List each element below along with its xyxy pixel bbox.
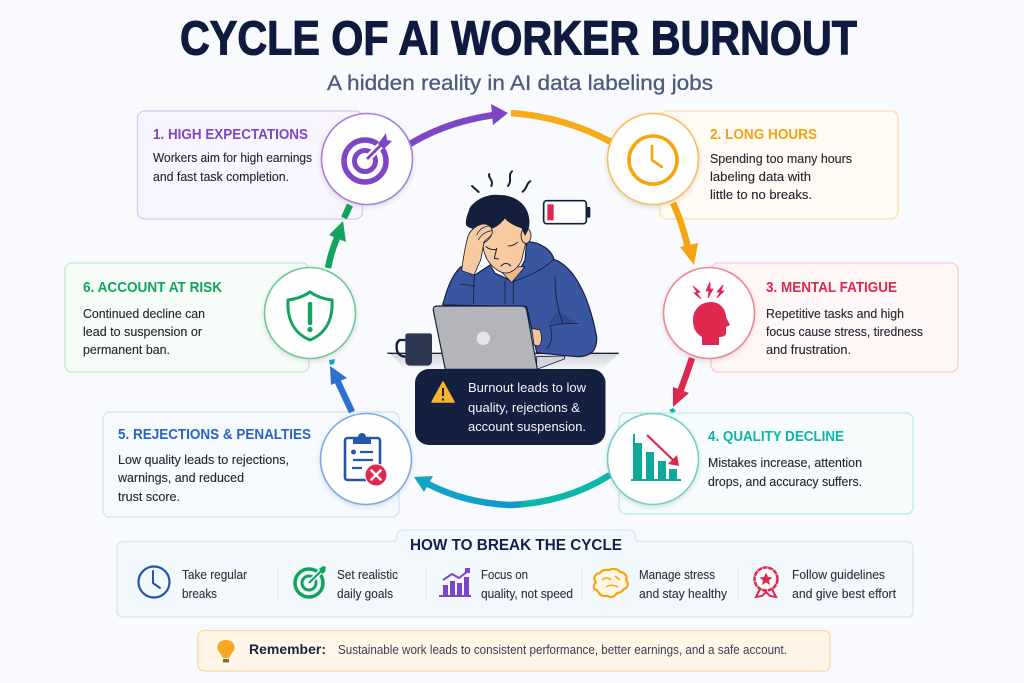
panel: 2 long hours: little to no breaks. xyxy=(710,187,812,202)
tip: manage stress: and stay healthy xyxy=(639,586,728,601)
icon: low battery xyxy=(544,201,590,224)
tip: take regular breaks: breaks xyxy=(182,586,217,601)
panel: 3 mental fatigue: Repetitive tasks and high xyxy=(766,306,904,321)
title: CYCLE OF AI WORKER BURNOUT xyxy=(180,12,857,66)
panel: 1 high expectations: Workers aim for high earnings xyxy=(153,150,312,165)
node: clock icon xyxy=(608,114,698,204)
arrow: blue xyxy=(329,359,352,412)
illustration: burned-out worker at laptop xyxy=(387,171,619,370)
node: declining chart icon xyxy=(608,414,698,504)
panel: 4 quality decline: 4. QUALITY DECLINE xyxy=(708,429,844,445)
hand on keyboard xyxy=(532,328,542,346)
arrow: orange top xyxy=(511,113,611,142)
node: head icon xyxy=(664,268,754,358)
panel: 3 mental fatigue: focus cause stress, tiredness xyxy=(766,324,923,339)
tip: set realistic daily goals xyxy=(295,566,399,601)
panel: 6 account at risk: permanent ban. xyxy=(83,342,170,357)
panel: 6 account at risk: Continued decline can xyxy=(83,306,205,321)
tip: focus on quality: quality, not speed xyxy=(481,586,573,601)
tip: follow guidelines: Follow guidelines xyxy=(792,567,885,582)
panel: remember: Remember: xyxy=(249,641,326,657)
panel: 3 mental fatigue xyxy=(711,263,958,372)
callout: burnout warning: quality, rejections & xyxy=(468,400,580,415)
panel: 5 rejections and penalties: warnings, and reduced xyxy=(117,470,244,485)
panel: 5 rejections and penalties: 5. REJECTIONS & PENALTIES xyxy=(118,427,311,443)
mug xyxy=(397,333,432,366)
laptop xyxy=(433,306,565,369)
arrow: green xyxy=(328,205,350,268)
panel: 6 account at risk: lead to suspension or xyxy=(83,324,203,339)
tip: take regular breaks xyxy=(138,566,248,601)
icon: warning triangle xyxy=(432,382,454,402)
heading: HOW TO BREAK THE CYCLE xyxy=(410,537,622,554)
panel: 4 quality decline xyxy=(619,413,913,514)
cycle arrows xyxy=(328,104,698,505)
panel: remember xyxy=(198,630,830,671)
panel: how to break the cycle xyxy=(117,530,913,617)
tip: focus on quality: Focus on xyxy=(481,567,528,582)
callout: burnout warning: account suspension. xyxy=(468,419,586,434)
panel: 3 mental fatigue: 3. MENTAL FATIGUE xyxy=(766,280,897,296)
tip: follow guidelines: and give best effort xyxy=(792,586,896,601)
panel: 6 account at risk: 6. ACCOUNT AT RISK xyxy=(83,280,222,296)
panel: 3 mental fatigue: and frustration. xyxy=(766,342,851,357)
arrow: orange down xyxy=(673,203,698,265)
panel: 4 quality decline: drops, and accuracy suffers. xyxy=(708,474,862,489)
panel: 1 high expectations: and fast task completion. xyxy=(153,169,289,184)
arrow: teal bottom xyxy=(414,475,610,505)
panel: 5 rejections and penalties: trust score. xyxy=(118,489,180,504)
panel: 6 account at risk xyxy=(65,263,309,372)
panel: 2 long hours: Spending too many hours xyxy=(710,151,852,166)
panel: 1 high expectations xyxy=(138,111,362,219)
tip: set realistic daily goals: daily goals xyxy=(337,586,393,601)
tip: follow guidelines xyxy=(754,567,896,601)
callout: burnout warning xyxy=(415,369,606,445)
tip: manage stress: Manage stress xyxy=(639,567,715,582)
panel: 5 rejections and penalties: Low quality leads to rejections, xyxy=(118,452,289,467)
hoodie xyxy=(443,242,597,357)
callout: burnout warning: Burnout leads to low xyxy=(468,380,586,395)
arrow: red xyxy=(669,358,692,413)
desk xyxy=(387,353,619,370)
arrow: purple xyxy=(410,104,508,144)
panel: 2 long hours: 2. LONG HOURS xyxy=(710,127,817,143)
panel: 2 long hours xyxy=(660,111,898,219)
icon: light bulb xyxy=(217,640,235,662)
node: shield icon xyxy=(264,268,356,358)
tip: manage stress xyxy=(594,567,728,601)
panel: 5 rejections and penalties xyxy=(103,412,399,517)
tip: take regular breaks: Take regular xyxy=(182,567,248,582)
panel: 4 quality decline: Mistakes increase, attention xyxy=(708,455,862,470)
node: target icon xyxy=(322,114,412,204)
head xyxy=(462,195,531,283)
panel: 1 high expectations: 1. HIGH EXPECTATIONS xyxy=(153,127,308,143)
tip: set realistic daily goals: Set realistic xyxy=(337,567,399,582)
subtitle: A hidden reality in AI data labeling jobs xyxy=(327,71,713,95)
panel: 2 long hours: labeling data with xyxy=(710,169,811,184)
stress marks xyxy=(472,171,530,192)
tip: focus on quality xyxy=(439,567,573,601)
node: clipboard icon xyxy=(320,414,412,504)
panel: remember: Sustainable work leads to consistent performance, better earnings, and a safe account. xyxy=(338,643,787,657)
